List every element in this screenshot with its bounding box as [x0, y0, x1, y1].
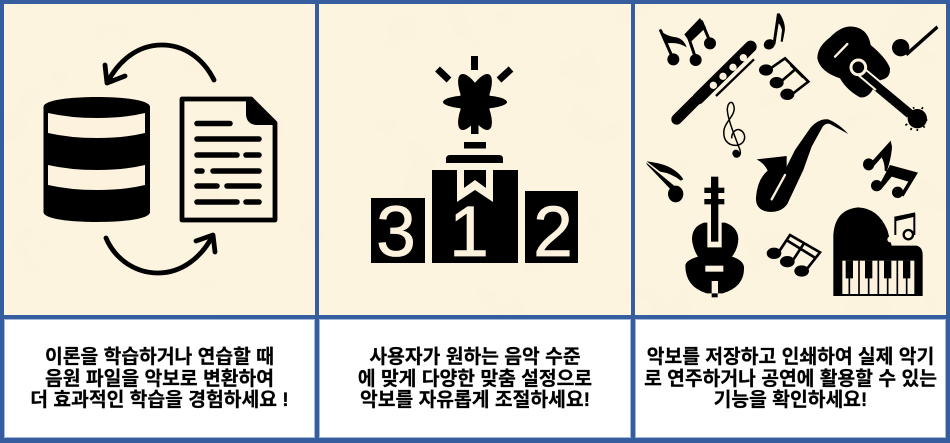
icon: grand piano: [833, 207, 923, 296]
caption: custom settings: 사용자가 원하는 음악 수준: [369, 347, 581, 368]
icon: document: [182, 99, 276, 220]
panel: instruments: [635, 4, 946, 315]
icon: burst rays: [438, 56, 511, 80]
panel: data conversion: [4, 4, 315, 315]
caption: save and print: [635, 319, 946, 438]
panel: podium: [319, 4, 631, 315]
caption: custom settings: 에 맞게 다양한 맞춤 설정으로: [358, 368, 592, 390]
caption: theory practice: 더 효과적인 학습을 경험하세요 !: [30, 390, 289, 411]
icon: star: [443, 70, 507, 134]
icon: triple notes upper: [759, 58, 808, 100]
icon: viola: [685, 177, 744, 297]
podium: third place: 3: [376, 193, 416, 272]
podium: first place: [432, 170, 518, 272]
caption: save and print: 기능을 확인하세요!: [714, 390, 867, 411]
icon: saxophone: [756, 119, 848, 212]
caption: custom settings: 악보를 자유롭게 조절하세요!: [360, 390, 590, 411]
caption: save and print: 악보를 저장하고 인쇄하여 실제 악기: [647, 347, 934, 368]
icon: database: [44, 97, 150, 222]
icon: notes right: [863, 141, 918, 198]
podium: second place: 2: [533, 193, 573, 272]
icon: flute: [677, 47, 754, 119]
arrow: database to document: [106, 235, 215, 273]
caption: theory practice: 이론을 학습하거나 연습할 때: [45, 347, 274, 368]
icon: note top right: [892, 25, 938, 56]
icon: notes top left: [659, 18, 716, 66]
arrow: document to database: [105, 45, 214, 83]
podium: first place: 1: [449, 193, 489, 272]
caption: save and print: 로 연주하거나 공연에 활용할 수 있는: [644, 368, 937, 390]
icon: guitar: [817, 26, 927, 131]
caption: theory practice: 음원 파일을 악보로 변환하여: [45, 368, 274, 390]
caption: custom settings: [319, 319, 631, 438]
caption: theory practice: [4, 319, 315, 438]
icon: note top center: [762, 13, 785, 51]
icon: note left: [646, 161, 683, 202]
icon: treble clef: [724, 102, 745, 157]
icon: stand: [446, 142, 503, 163]
icon: triple notes lower: [767, 235, 820, 277]
